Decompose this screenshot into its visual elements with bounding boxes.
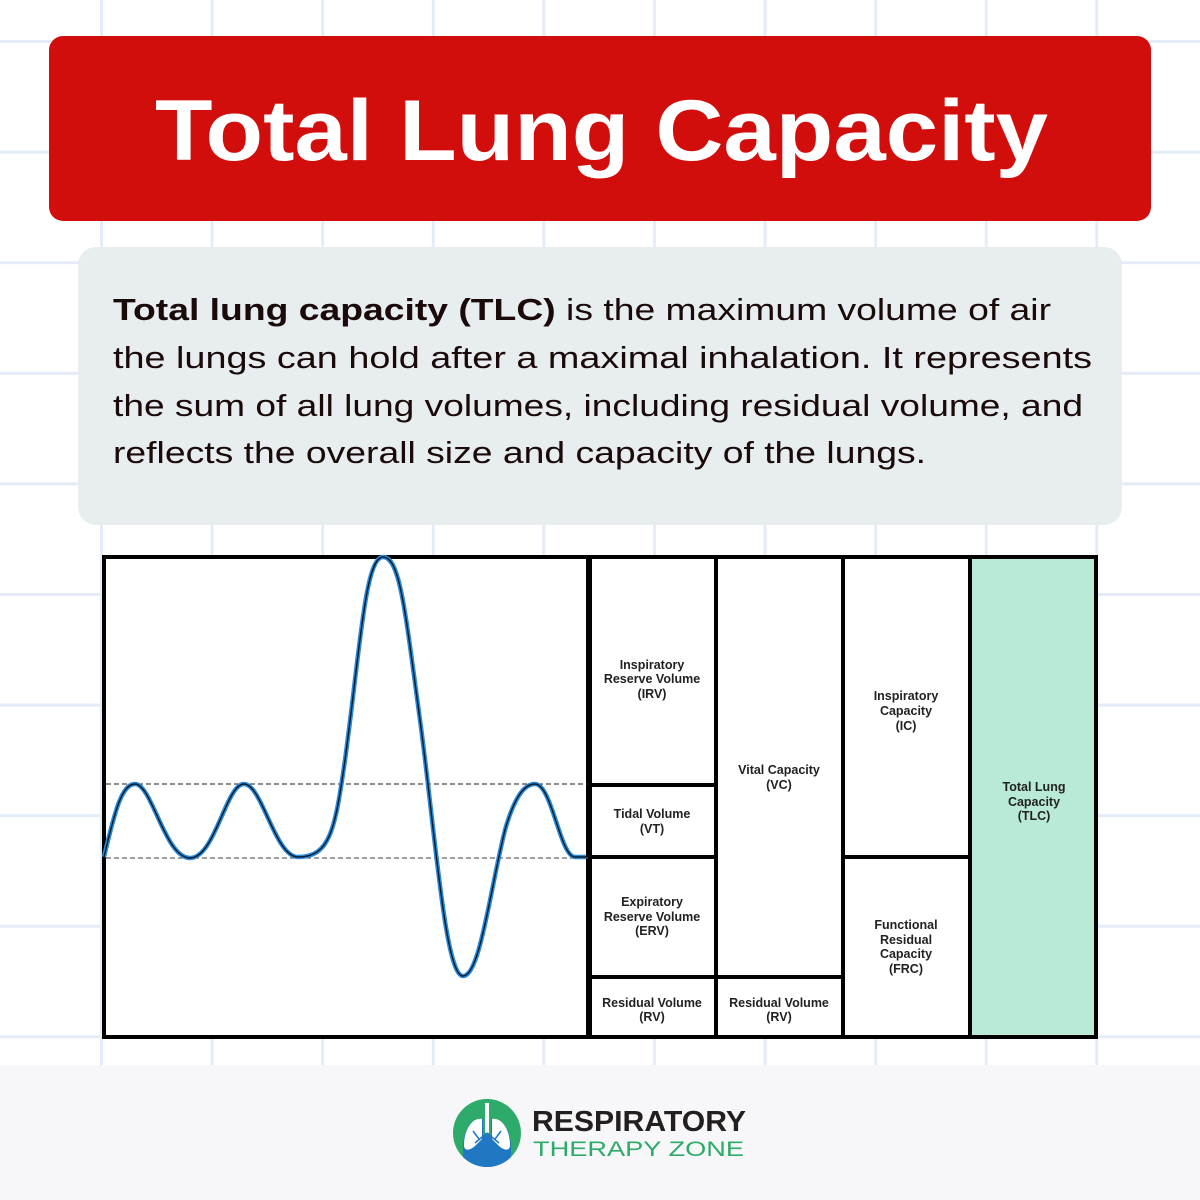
box: RV (VC column): Residual Volume xyxy=(729,996,829,1010)
box: RV xyxy=(590,977,716,1037)
box: TLC: Capacity xyxy=(1008,795,1060,809)
title banner: Total Lung Capacity xyxy=(155,83,1048,179)
box: IC: Capacity xyxy=(880,704,932,718)
box: VT xyxy=(590,785,716,857)
box: IRV: Reserve Volume xyxy=(604,672,700,686)
box: RV: (RV) xyxy=(639,1010,665,1024)
box: IRV: (IRV) xyxy=(638,687,666,701)
box: VC xyxy=(716,557,843,977)
box: FRC: Capacity xyxy=(880,947,932,961)
box: TLC: (TLC) xyxy=(1018,809,1050,823)
box: FRC: (FRC) xyxy=(889,962,923,976)
box: VT: (VT) xyxy=(640,822,664,836)
box: ERV: Expiratory xyxy=(621,895,683,909)
title banner xyxy=(49,36,1151,221)
box: ERV: (ERV) xyxy=(635,924,669,938)
box: FRC: Functional xyxy=(874,918,938,932)
box: FRC xyxy=(843,857,970,1037)
logo text xyxy=(532,1106,746,1161)
box: IRV: Inspiratory xyxy=(620,658,684,672)
box: IRV xyxy=(590,557,716,785)
box: VT: Tidal Volume xyxy=(614,807,690,821)
box: IC xyxy=(843,557,970,857)
box: TLC: Total Lung xyxy=(1003,780,1065,794)
box: RV: Residual Volume xyxy=(602,996,702,1010)
description panel: the sum of all lung volumes, including residual volume, and xyxy=(113,388,1083,423)
description panel xyxy=(78,247,1122,525)
box: RV (VC column) xyxy=(716,977,843,1037)
description panel: reflects the overall size and capacity of the lungs. xyxy=(113,435,926,470)
box: ERV xyxy=(590,857,716,977)
box: RV (VC column): (RV) xyxy=(766,1010,792,1024)
box: VC: Vital Capacity xyxy=(738,763,820,777)
box: FRC: Residual xyxy=(880,933,932,947)
box: IC: Inspiratory xyxy=(874,689,938,703)
description panel: Total lung capacity (TLC) is the maximum volume of air xyxy=(113,292,1051,327)
footer xyxy=(0,1065,1200,1200)
box: VC: (VC) xyxy=(766,778,792,792)
logo text: RESPIRATORY xyxy=(532,1106,746,1138)
box: ERV: Reserve Volume xyxy=(604,910,700,924)
box: IC: (IC) xyxy=(896,719,916,733)
logo icon xyxy=(453,1099,521,1167)
box: TLC xyxy=(970,557,1096,1037)
logo text: THERAPY ZONE xyxy=(533,1138,744,1161)
description panel: the lungs can hold after a maximal inhalation. It represents xyxy=(113,340,1092,375)
chart frame with waveform xyxy=(104,557,588,1037)
